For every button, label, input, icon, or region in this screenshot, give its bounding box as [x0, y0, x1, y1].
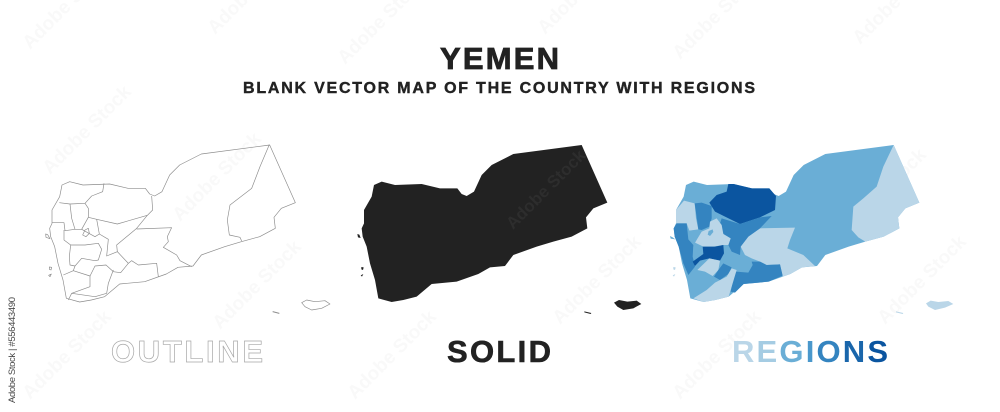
region: south coast light: [693, 268, 737, 302]
watermark pattern: Adobe Stock: [19, 306, 116, 404]
region: west coast dark: [674, 223, 695, 275]
watermark pattern: Adobe Stock: [834, 144, 931, 242]
region: south dark: [731, 262, 783, 293]
watermark on solid map: Adobe Stock: [502, 146, 590, 233]
region: small dark: [714, 263, 732, 280]
region: small medium: [693, 247, 703, 258]
watermark pattern: Adobe Stock: [39, 81, 136, 179]
region: central dark: [720, 216, 772, 255]
region: central darkest: [693, 245, 724, 266]
watermark pattern: Adobe Stock: [169, 128, 266, 226]
map: solid silhouette: [357, 145, 641, 314]
islands: [670, 236, 953, 314]
map: outline with region borders: [46, 145, 330, 313]
region: south-central light: [697, 258, 720, 276]
map: coloured regions: [670, 145, 953, 314]
islands: [46, 234, 330, 313]
watermark pattern: Adobe Stock: [549, 231, 646, 329]
region: west light: [676, 201, 698, 231]
watermark pattern: Adobe Stock: [669, 306, 766, 404]
base silhouette: [674, 145, 919, 302]
islands: [357, 234, 641, 314]
label: solid: SOLID: [447, 334, 551, 369]
label: outline: OUTLINE: [111, 334, 263, 369]
label: regions: REGIONS: [732, 334, 888, 369]
region: south light: [741, 228, 815, 277]
watermark pattern: Adobe Stock: [344, 306, 441, 404]
title: YEMEN: [440, 41, 559, 76]
region: north-central dark: [695, 203, 712, 230]
watermark pattern: Adobe Stock: [209, 236, 306, 334]
region: far east light: [852, 145, 919, 242]
region: small west medium: [688, 230, 702, 243]
subtitle: BLANK VECTOR MAP OF THE COUNTRY WITH REGIONS: [243, 80, 755, 97]
stock id side label: Adobe Stock | #556443490: [7, 297, 18, 403]
region: central light: [695, 218, 731, 247]
region: north darkest: [709, 184, 776, 224]
watermark pattern: Adobe Stock: [874, 231, 971, 329]
region: capital medium: [708, 229, 713, 236]
